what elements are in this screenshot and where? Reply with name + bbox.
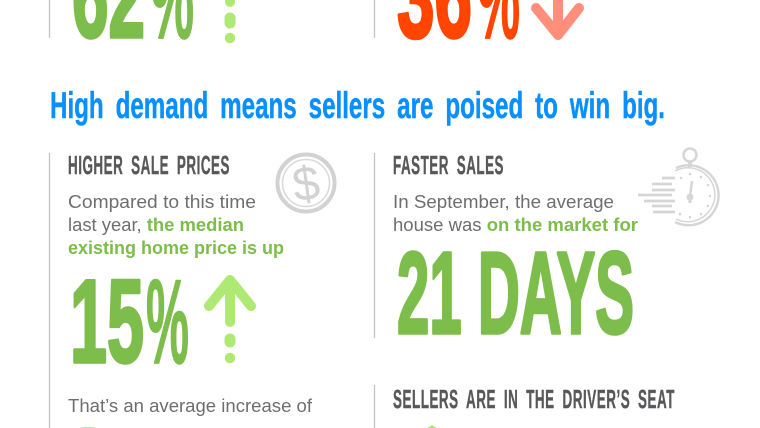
icon: dollar coin: $ xyxy=(289,156,323,213)
text block: compared to this time: Compared to this time xyxy=(68,192,256,212)
text block: on the market: house was on the market for xyxy=(393,215,638,235)
panel: higher sale prices xyxy=(68,150,334,428)
text block: in september: In September, the average xyxy=(393,192,614,212)
icon: cropped green arrow tip xyxy=(427,425,437,428)
icon: cropped green mark xyxy=(76,427,100,428)
panel: sellers in driver's seat xyxy=(393,384,675,428)
icon: orange down arrow xyxy=(536,0,579,35)
panel: higher sale prices: % xyxy=(146,255,189,389)
panel: faster sales xyxy=(393,148,719,358)
icon: stopwatch xyxy=(638,148,719,225)
heading: higher sale prices: HIGHER SALE PRICES xyxy=(68,150,230,180)
text block: existing home price: existing home price is up xyxy=(68,238,284,258)
text block: median price: last year, the median xyxy=(68,215,244,235)
heading: faster sales: FASTER SALES xyxy=(393,150,504,180)
stat: 15 percent: 15 xyxy=(70,256,144,388)
icon: green dotted arrow stub xyxy=(225,0,235,38)
icon: dollar coin xyxy=(278,154,334,213)
icon: green up arrow xyxy=(209,280,251,358)
text block: average increase: That’s an average increase of xyxy=(68,396,313,416)
